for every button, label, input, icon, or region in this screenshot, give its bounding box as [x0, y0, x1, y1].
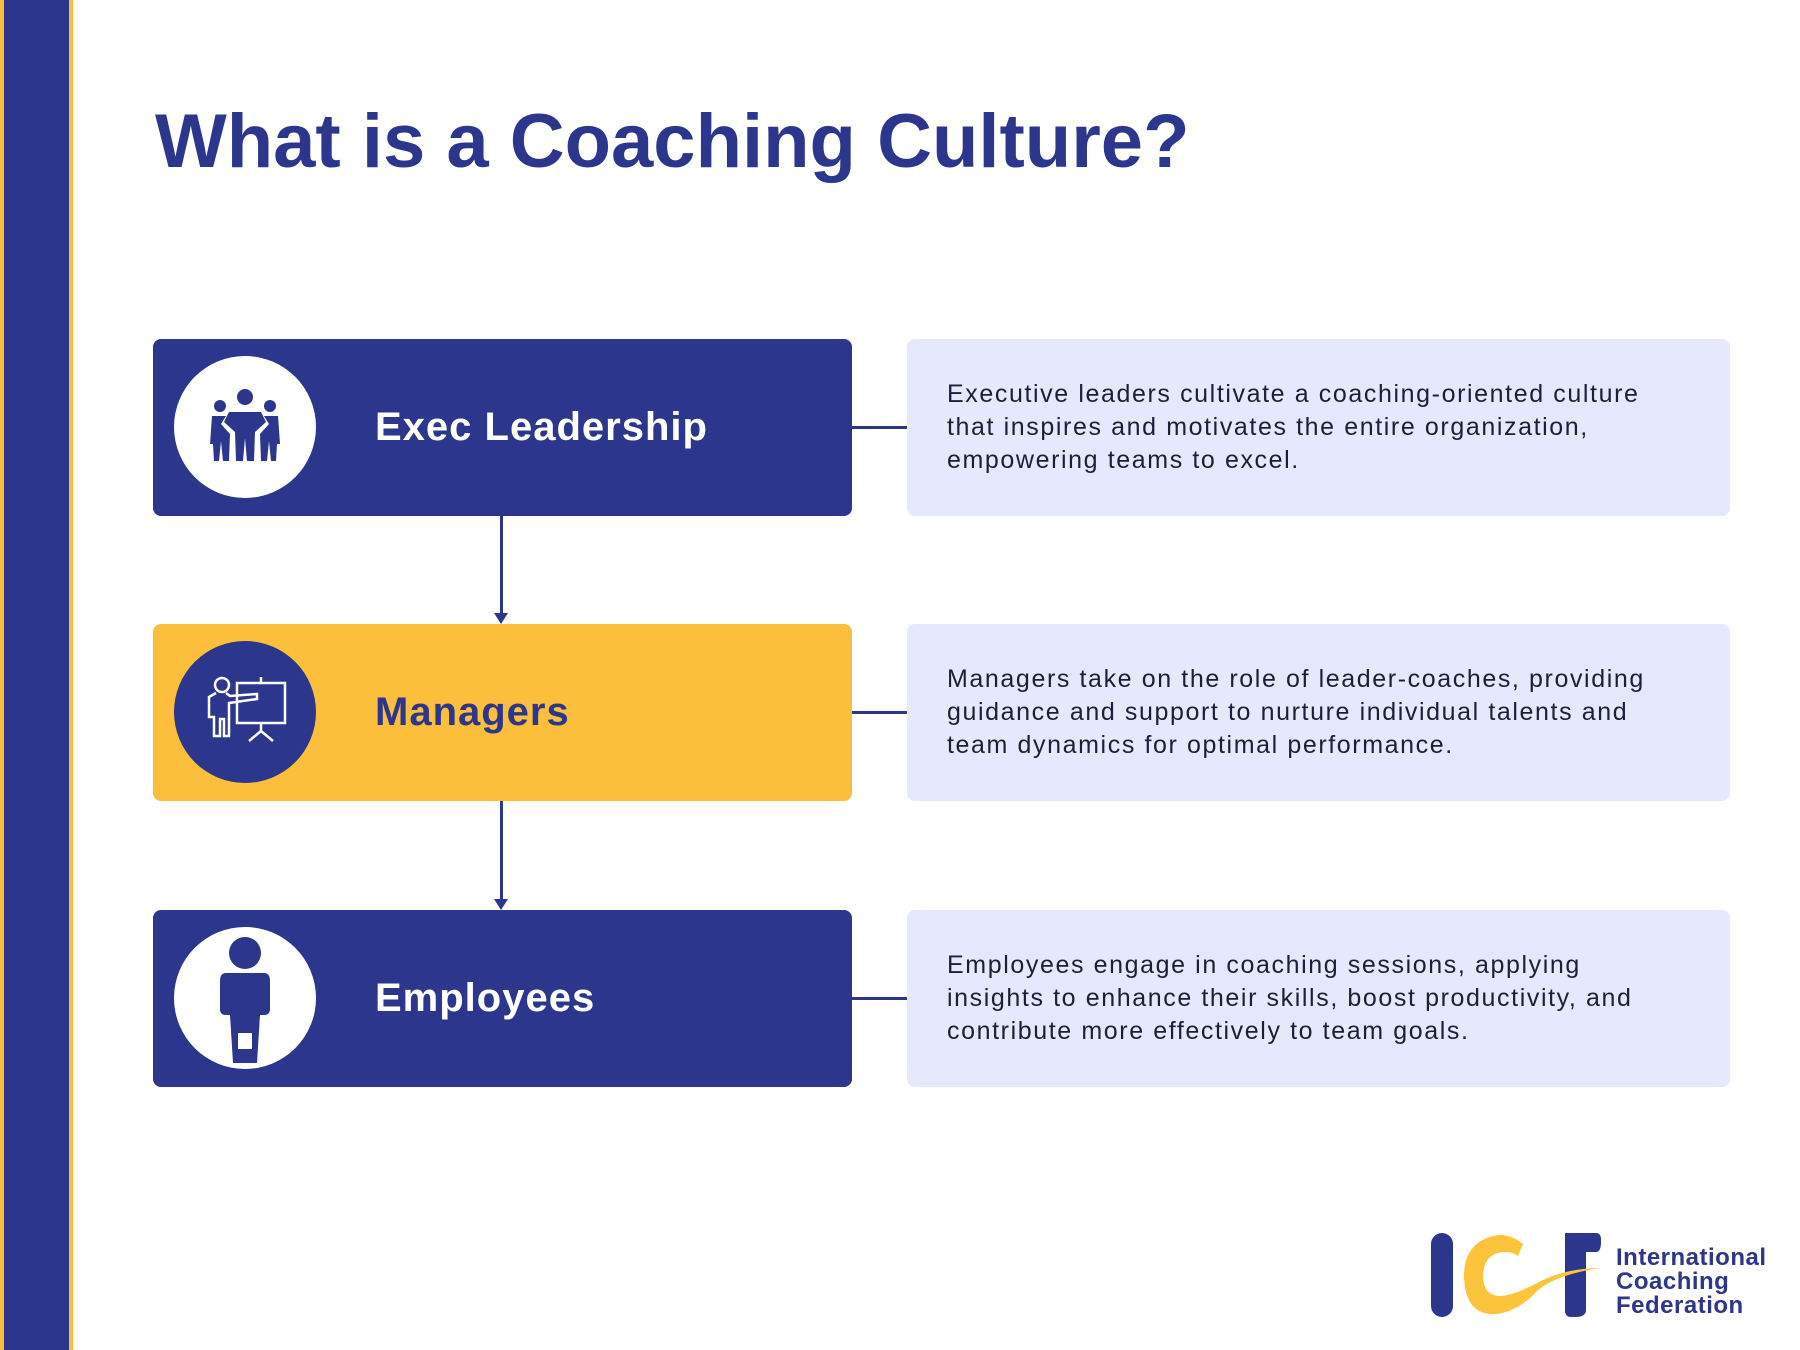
text: employees description: [907, 910, 1730, 1087]
text: employees description: insights to enhance their skills, boost productivity, and: [947, 984, 1632, 1012]
text: employees description: Employees engage in coaching sessions, applying: [947, 951, 1581, 979]
text: managers description: guidance and support to nurture individual talents and: [947, 698, 1628, 726]
heading: Managers: [375, 690, 570, 734]
logo: ICF: [1431, 1233, 1767, 1319]
heading: Employees: [375, 976, 595, 1020]
text: exec description: Executive leaders cultivate a coaching-oriented culture: [947, 380, 1640, 408]
heading: Exec Leadership: [375, 405, 708, 449]
title: What is a Coaching Culture?: [155, 99, 1190, 184]
connector: [852, 426, 907, 429]
text: exec description: that inspires and motivates the entire organization,: [947, 413, 1589, 441]
panel: managers: [153, 624, 852, 801]
logo: ICF: International: [1616, 1244, 1767, 1271]
text: managers description: [907, 624, 1730, 801]
panel: exec leadership: [153, 339, 852, 516]
left accent bar: [0, 0, 73, 1350]
text: exec description: [907, 339, 1730, 516]
text: exec description: empowering teams to excel.: [947, 446, 1300, 474]
arrow: [500, 515, 503, 615]
text: managers description: team dynamics for optimal performance.: [947, 731, 1454, 759]
icon: leadership group: [174, 356, 316, 498]
icon: presenter: [174, 641, 316, 783]
arrow: [500, 801, 503, 901]
text: employees description: contribute more effectively to team goals.: [947, 1017, 1470, 1045]
icon: person: [174, 927, 316, 1069]
panel: employees: [153, 910, 852, 1087]
connector: [852, 711, 907, 714]
logo: ICF: Federation: [1616, 1292, 1744, 1319]
connector: [852, 997, 907, 1000]
text: managers description: Managers take on the role of leader-coaches, providing: [947, 665, 1645, 693]
logo: ICF: Coaching: [1616, 1268, 1729, 1295]
